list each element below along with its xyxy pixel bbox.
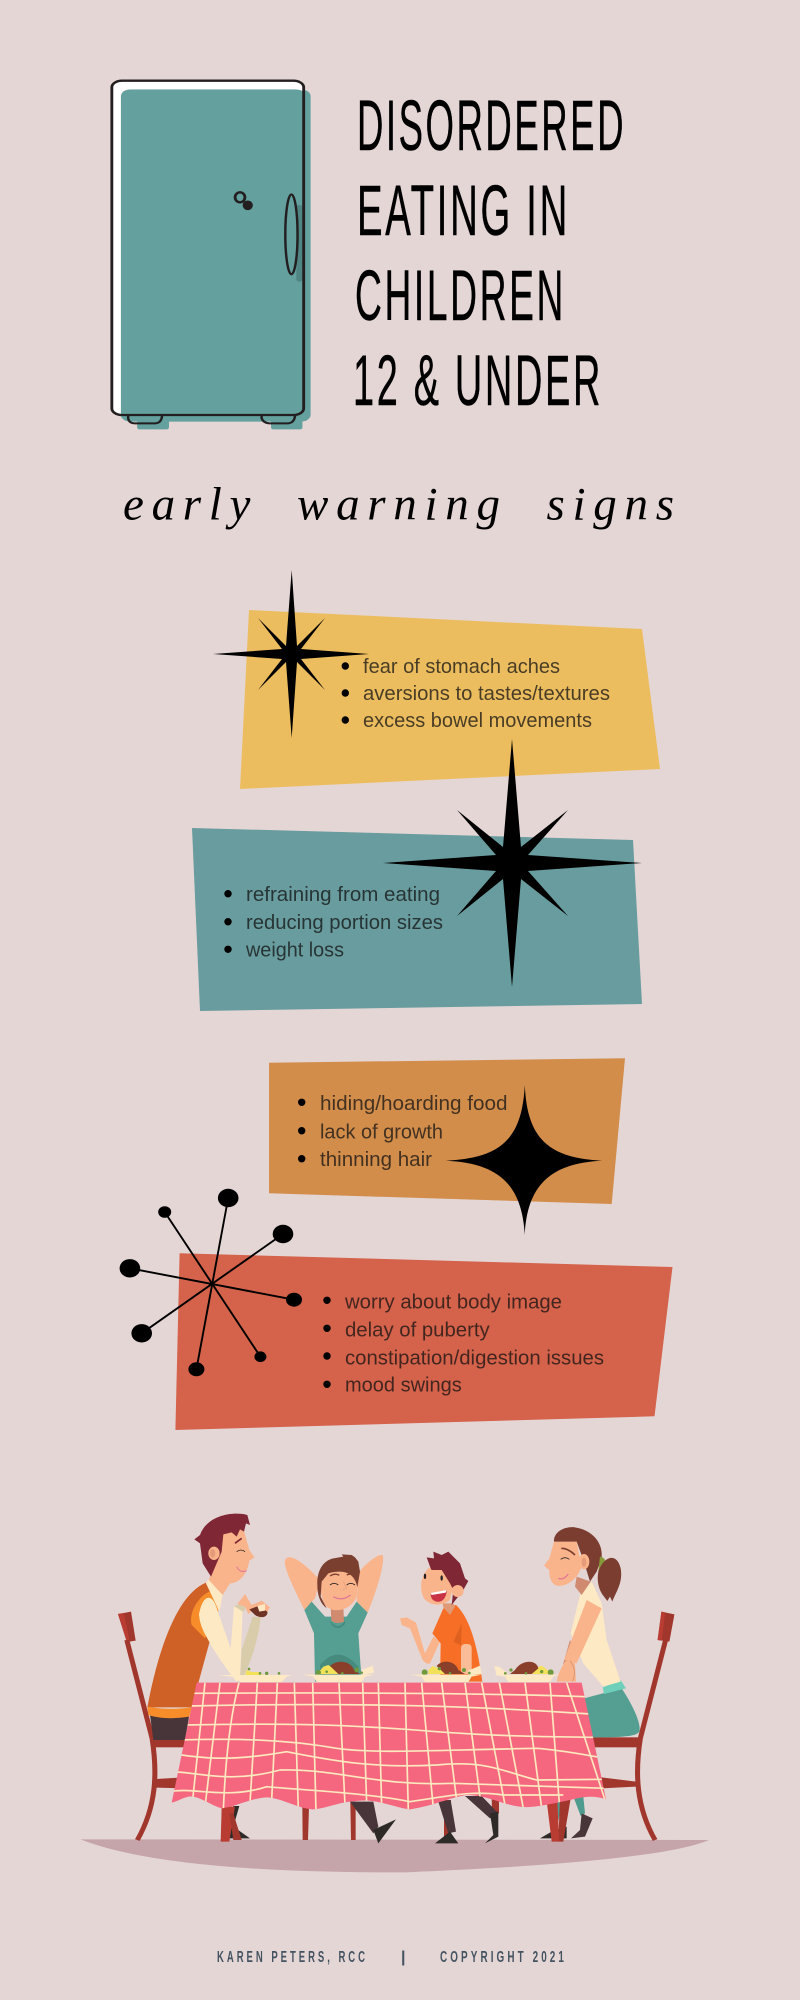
footer credit: COPYRIGHT 2021 <box>440 1949 567 1966</box>
person: father <box>147 1514 270 1740</box>
plates of food: right <box>410 1662 559 1682</box>
list: physical signs: fear of stomach aches <box>363 655 560 678</box>
list: body and mood signs: mood swings <box>345 1374 462 1397</box>
icon: eight-point star <box>213 570 369 738</box>
title <box>353 87 626 421</box>
list: physical signs <box>342 655 610 732</box>
list: growth signs: thinning hair <box>320 1148 432 1171</box>
plates of food: left <box>218 1662 375 1682</box>
list: eating signs: weight loss <box>245 939 344 962</box>
list: eating signs <box>224 883 443 962</box>
icon: atomic starburst <box>120 1189 302 1376</box>
person: boy with hands behind head <box>285 1554 383 1682</box>
list: body and mood signs: delay of puberty <box>345 1319 490 1342</box>
title: CHILDREN <box>355 257 566 336</box>
list: body and mood signs <box>323 1290 604 1397</box>
floor shadow <box>81 1839 709 1872</box>
legs and table legs <box>221 1796 593 1843</box>
list: eating signs: reducing portion sizes <box>246 911 443 934</box>
subtitle: early warning signs <box>123 478 674 530</box>
list: eating signs: refraining from eating <box>246 883 440 906</box>
person: boy talking <box>400 1552 482 1682</box>
panel: yellow warning signs <box>213 570 660 789</box>
footer credit: KAREN PETERS, RCC <box>217 1949 368 1966</box>
list: growth signs: hiding/hoarding food <box>320 1092 508 1115</box>
panel: teal warning signs <box>192 739 642 1011</box>
icon: four-point star <box>446 1085 602 1235</box>
icon: large eight-point star <box>383 739 642 987</box>
tablecloth <box>170 1683 607 1812</box>
list: body and mood signs: worry about body image <box>344 1290 562 1313</box>
illustration: family at dinner table <box>81 1514 709 1872</box>
list: physical signs: aversions to tastes/textures <box>363 682 610 705</box>
list: body and mood signs: constipation/digestion issues <box>345 1346 604 1369</box>
footer credit: | <box>401 1949 410 1966</box>
person: mother <box>544 1527 640 1737</box>
list: growth signs <box>298 1092 508 1171</box>
chairs <box>118 1612 674 1840</box>
title: EATING IN <box>357 172 570 251</box>
panel: orange warning signs <box>269 1058 625 1235</box>
icon: refrigerator <box>112 81 311 429</box>
list: physical signs: excess bowel movements <box>363 709 592 732</box>
list: growth signs: lack of growth <box>320 1120 443 1143</box>
panel: red warning signs <box>175 1253 672 1430</box>
